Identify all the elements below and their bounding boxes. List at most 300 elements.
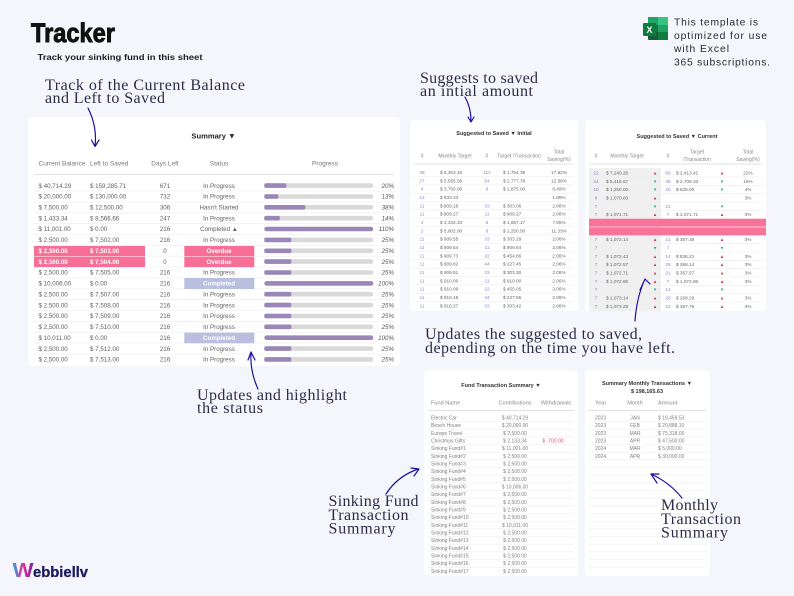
initial rows: 33 (484, 303, 490, 308)
current column headers: Target (690, 150, 705, 156)
current rows: ▼ (720, 187, 724, 192)
initial column headers: # (421, 154, 424, 160)
initial column headers (421, 150, 571, 163)
current rows: 22% (743, 170, 753, 176)
summary column headers: Current Balance (38, 160, 86, 168)
summary rows: $ 7,508.00 (90, 302, 120, 309)
fund rows: $ 2,500.00 (503, 462, 527, 468)
initial rows: $ 909.73 (440, 253, 459, 258)
summary rows: $ 7,507.00 (90, 291, 120, 298)
fund rows: Europe Travel (431, 431, 462, 437)
heading: monthly transactions (602, 381, 692, 395)
initial rows: $ 909.55 (440, 237, 459, 242)
summary rows: In Progress (203, 291, 235, 298)
current rows: ▼ (720, 204, 724, 209)
summary rows: $ 7,500.00 (38, 204, 68, 212)
initial rows: $ 909.64 (440, 245, 459, 250)
summary rows: $ 8,566.66 (90, 215, 120, 222)
current rows: ▲ (653, 296, 657, 300)
current rows: 7 (667, 246, 670, 250)
initial rows: 2.06% (552, 253, 566, 258)
annotation: suggested initial: an intial amount (420, 83, 534, 100)
initial rows: 38 (419, 170, 425, 175)
excel compatibility note: This template is (674, 18, 758, 28)
monthly rows: $ 5,000.00 (658, 446, 682, 452)
initial rows: 11 (485, 212, 490, 217)
summary rows: $ 2,500.00 (38, 313, 68, 320)
monthly column headers: Amount (658, 400, 678, 406)
fund rows: Sinking Fund#1 (431, 446, 466, 452)
initial rows: 11 (420, 278, 425, 283)
initial rows: $ 303.30 (503, 270, 522, 275)
overdue band (589, 219, 766, 235)
annotation: status (197, 387, 348, 417)
current rows: $ 7,240.26 (606, 170, 629, 176)
initial rows: 33 (484, 270, 490, 275)
monthly rows: $ 19,459.53 (658, 416, 685, 422)
current rows: ▼ (720, 287, 724, 292)
summary rows: 14% (382, 215, 394, 222)
current rows: $ 625.00 (676, 187, 695, 192)
arrow: to initial panel (465, 97, 474, 122)
summary rows: $ 1,433.34 (38, 215, 68, 222)
summary rows: 306 (160, 204, 171, 212)
current rows: $ 1,072.57 (606, 262, 629, 267)
summary column headers: Left to Saved (90, 160, 129, 168)
initial rows: 11 (420, 303, 425, 308)
initial rows: $ 454.86 (503, 253, 522, 258)
current rows: $ 1,071.71 (676, 212, 699, 217)
current column headers: Saving(%) (736, 157, 760, 163)
fund rows: Sinking Fund#5 (431, 477, 466, 483)
summary rows: 25% (381, 313, 394, 320)
annotation: updates suggested: Updates the suggested to saved, (425, 326, 642, 343)
initial rows: 11 (420, 245, 425, 250)
summary column headers: Progress (312, 160, 339, 168)
initial rows: 2.06% (552, 212, 566, 217)
current rows: 3% (745, 254, 751, 259)
monthly rows: 2023 (595, 431, 606, 437)
summary column headers (38, 160, 339, 168)
initial rows: 8 (486, 187, 489, 192)
current rows: ▲ (653, 237, 657, 242)
monthly rows: JAN (630, 416, 640, 422)
fund rows: $ 2,500.00 (503, 477, 527, 483)
annotation: sinking fund summary (328, 493, 418, 538)
summary rows: In Progress (203, 215, 235, 222)
fund rows: Sinking Fund#2 (431, 454, 466, 460)
completed highlights (184, 278, 254, 343)
initial rows: $ 909.82 (440, 262, 459, 267)
summary rows: In Progress (203, 194, 235, 201)
initial rows: 22 (484, 287, 490, 292)
monthly rows: $ 20,888.10 (658, 423, 685, 429)
current rows: ▼ (653, 287, 657, 292)
current rows: $ 1,250.00 (606, 187, 629, 192)
current rows: ▲ (720, 254, 724, 259)
annotation: updates suggested (425, 326, 675, 357)
initial rows: 114 (483, 170, 491, 175)
summary rows: 216 (160, 281, 171, 288)
summary rows: 38% (382, 204, 394, 212)
summary rows: $ 7,509.00 (90, 313, 120, 320)
current rows: ▼ (720, 246, 724, 250)
monthly rows: 2023 (595, 438, 606, 444)
summary rows: $ 2,500.00 (38, 248, 68, 255)
summary rows: $ 2,500.00 (38, 237, 68, 244)
current rows: $ 1,073.29 (606, 304, 629, 309)
initial column headers: Monthly Target (438, 154, 472, 160)
annotation: status: the status (197, 400, 263, 417)
current rows: 66 (665, 170, 671, 176)
annotation: monthly summary (661, 497, 741, 542)
current rows: 7 (595, 296, 598, 300)
fund rows: $ 20,000.00 (502, 423, 528, 429)
fund rows: $ 10,011.00 (502, 523, 528, 529)
annotation: monthly summary: Transaction (661, 511, 741, 528)
annotation: sinking fund summary: Sinking Fund (328, 493, 418, 510)
summary rows: 216 (160, 226, 171, 233)
fund rows: $ 11,001.00 (502, 446, 528, 452)
current rows: 3% (745, 237, 751, 242)
current rows: 3% (745, 212, 751, 217)
current rows: 28 (665, 262, 671, 267)
current column headers: /Transaction (683, 157, 711, 163)
summary rows: $ 7,512.00 (90, 346, 120, 353)
annotation: monthly summary: Monthly (661, 497, 718, 514)
initial rows: $ 909.64 (503, 245, 522, 250)
monthly column headers: Month (627, 400, 643, 406)
monthly rows: $ 75,318.00 (658, 431, 685, 437)
fund rows: $ 2,500.00 (503, 546, 527, 552)
heading: summary: Summary ▼ (191, 132, 236, 140)
summary rows: 216 (160, 346, 171, 353)
current rows: ▼ (653, 246, 657, 250)
monthly column headers (595, 400, 678, 406)
heading: monthly transactions: $ 198,165.63 (631, 389, 663, 395)
annotation: monthly summary: Summary (661, 524, 728, 542)
initial rows: $ 909.27 (503, 212, 522, 217)
initial rows: $ 303.18 (503, 237, 522, 242)
fund rows: $ 2,500.00 (503, 569, 527, 575)
summary rows: Overdue (206, 248, 232, 255)
current rows: $ 268.29 (676, 296, 695, 300)
heading: monthly transactions: Summary Monthly Transactions ▼ (602, 381, 692, 387)
monthly rows: MAR (629, 446, 641, 452)
summary rows: $ 12,500.00 (90, 204, 123, 212)
current rows: 21 (665, 237, 671, 242)
summary rows (38, 183, 394, 364)
current rows: 10 (593, 187, 599, 192)
current rows: 3% (745, 270, 751, 276)
summary rows: 25% (381, 324, 394, 331)
summary rows: 100% (378, 281, 394, 288)
subtitle: Track your sinking fund in this sheet (38, 52, 203, 62)
current rows: 22 (593, 170, 599, 176)
summary rows: In Progress (203, 237, 235, 244)
summary rows: $ 2,500.00 (38, 259, 68, 266)
summary rows: 25% (381, 291, 394, 298)
initial rows: 2.06% (552, 303, 566, 308)
fund column headers (431, 400, 571, 406)
initial rows: $ 909.27 (440, 212, 459, 217)
summary rows: $ 0.00 (90, 226, 108, 233)
initial rows: 2.06% (552, 270, 566, 275)
initial rows: $ 833.33 (440, 195, 459, 200)
initial rows: 11 (485, 245, 490, 250)
arrow: to status (248, 352, 258, 389)
current column headers: # (595, 154, 598, 160)
monthly rows (595, 416, 685, 460)
current rows: $ 2,708.33 (676, 179, 699, 184)
summary rows: 247 (160, 215, 171, 222)
fund rows: $ 2,500.00 (503, 500, 527, 506)
summary rows: $ 2,500.00 (38, 346, 68, 353)
current rows: 7 (595, 212, 598, 217)
current rows: 7 (595, 279, 598, 284)
current rows: 3% (745, 279, 751, 284)
current rows: ▲ (720, 270, 724, 276)
fund rows: $ 2,500.00 (503, 561, 527, 567)
current rows: 7 (595, 237, 598, 242)
initial rows: 2.06% (552, 295, 566, 300)
current rows: $ 268.14 (676, 262, 695, 267)
initial rows: $ 910.00 (440, 278, 459, 283)
summary rows: $ 2,500.00 (38, 291, 68, 298)
annotation: current balance (45, 77, 245, 107)
summary rows: 216 (160, 324, 171, 331)
annotation: sinking fund summary: Summary (328, 520, 396, 538)
initial rows: 11 (420, 203, 425, 208)
current rows: $ 1,073.14 (606, 296, 629, 300)
fund column headers: Withdrawals (541, 400, 571, 406)
fund rows: Sinking Fund#3 (431, 462, 466, 468)
current rows: ▼ (653, 179, 657, 184)
annotation: current balance: Track of the Current Balance (45, 77, 245, 94)
annotation: current balance: and Left to Saved (45, 90, 165, 107)
summary rows: $ 7,504.00 (90, 259, 120, 266)
current rows: ▲ (720, 237, 724, 242)
monthly rows: APR (630, 454, 641, 460)
fund rows: Sinking Fund#14 (431, 546, 469, 552)
current rows: 3% (745, 196, 751, 200)
current column headers: Total (743, 150, 753, 156)
initial rows: 33 (484, 203, 490, 208)
initial rows: $ 909.91 (440, 270, 459, 275)
fund rows: $ 2,500.00 (503, 431, 527, 437)
summary rows: 0 (163, 259, 167, 266)
summary rows: 25% (381, 346, 394, 353)
summary rows: 216 (160, 357, 171, 364)
summary rows: $ 2,500.00 (38, 357, 68, 364)
fund rows: $ 2,500.00 (503, 454, 527, 460)
summary rows: 25% (381, 248, 394, 255)
summary rows: 216 (160, 302, 171, 309)
shaded monthly column (589, 168, 661, 311)
current rows: 48 (665, 179, 671, 184)
summary rows: Overdue (206, 259, 232, 266)
annotation: updates suggested: depending on the time you have left. (425, 340, 675, 357)
current rows: ▼ (653, 204, 657, 209)
initial rows: 11.33% (551, 228, 567, 233)
current rows: ▲ (653, 170, 657, 176)
initial rows: 1.89% (552, 195, 566, 200)
current column headers: Monthly Target (610, 154, 644, 160)
summary rows: 110% (379, 226, 394, 233)
current rows: 21 (665, 204, 671, 209)
current rows: ▲ (720, 296, 724, 300)
panel: monthly transactions (585, 370, 710, 576)
current rows: 7 (595, 204, 598, 209)
monthly rows: 2023 (595, 416, 606, 422)
current rows: $ 1,072.71 (606, 270, 629, 276)
initial rows: $ 1,250.50 (503, 228, 526, 233)
fund rows: Sinking Fund#9 (431, 508, 466, 514)
current rows: 24 (593, 179, 599, 184)
logo: Webbiellv (12, 560, 88, 582)
initial rows: 8 (486, 228, 489, 233)
fund rows: Sinking Fund#10 (431, 515, 469, 521)
summary rows: $ 2,500.00 (38, 302, 68, 309)
monthly rows: $ 30,000.00 (658, 454, 685, 460)
current rows: ▲ (653, 262, 657, 267)
current rows: 20 (665, 187, 671, 192)
current rows: 16% (743, 179, 753, 184)
initial rows: 17.82% (551, 170, 567, 175)
initial rows: 11 (420, 287, 425, 292)
summary rows: 25% (381, 259, 394, 266)
initial rows: 44 (484, 295, 490, 300)
current rows: ▲ (653, 212, 657, 217)
summary rows: In Progress (203, 270, 235, 277)
initial rows: $ 2,777.78 (503, 178, 526, 183)
initial rows: 2.06% (552, 203, 566, 208)
initial rows: 6 (486, 220, 489, 225)
current rows: 7 (595, 262, 598, 267)
summary column headers: Days Left (151, 160, 179, 168)
summary rows: 20% (381, 183, 394, 190)
initial rows: 11 (420, 270, 425, 275)
initial rows: $ 910.09 (440, 287, 459, 292)
current rows: 3% (745, 296, 751, 300)
current rows: 3% (745, 304, 751, 309)
current rows: ▲ (720, 279, 724, 284)
summary rows: $ 20,000.00 (38, 194, 72, 201)
fund rows: $ 10,006.00 (502, 484, 528, 490)
summary rows: $ 7,510.00 (90, 324, 120, 331)
fund rows: $ -700.00 (542, 438, 564, 444)
summary rows: $ 7,502.00 (90, 237, 120, 244)
fund rows: $ 2,500.00 (503, 515, 527, 521)
initial rows: $ 227.45 (503, 262, 522, 267)
initial rows: 11 (420, 212, 425, 217)
initial column headers: Total (554, 150, 564, 156)
summary rows: $ 10,011.00 (38, 335, 71, 342)
summary rows: In Progress (203, 357, 235, 364)
summary rows: In Progress (203, 302, 235, 309)
summary rows: $ 2,500.00 (38, 324, 68, 331)
current rows: $ 2,413.42 (676, 170, 699, 176)
current rows: 7 (595, 270, 598, 276)
fund rows: $ 2,500.00 (503, 508, 527, 514)
monthly rows: 2024 (595, 446, 606, 452)
summary rows: 13% (382, 194, 394, 201)
arrow: to fund summary (386, 468, 419, 494)
initial column headers: Target /Transaction (497, 154, 541, 160)
fund column headers: Contributions (499, 400, 532, 406)
current rows: $ 1,071.71 (606, 212, 629, 217)
initial column headers: # (486, 154, 489, 160)
current rows: 14 (665, 254, 671, 259)
fund rows: Sinking Fund#7 (431, 492, 466, 498)
initial rows: $ 303.06 (503, 203, 522, 208)
summary rows: 216 (160, 313, 171, 320)
current rows: 7 (667, 279, 670, 284)
summary rows: In Progress (203, 313, 235, 320)
summary rows: 216 (160, 335, 171, 342)
summary rows: $ 7,513.00 (90, 357, 120, 364)
current column headers (595, 150, 760, 163)
fund rows: $ 2,500.00 (503, 492, 527, 498)
initial rows: $ 1,875.00 (503, 187, 526, 192)
summary rows: 216 (160, 237, 171, 244)
summary rows: Completed ▲ (200, 226, 238, 233)
fund rows: Sinking Fund#15 (431, 554, 469, 560)
fund rows: Sinking Fund#11 (431, 523, 468, 529)
fund rows: $ 2,500.00 (503, 538, 527, 544)
summary rows: Hasn't Started (199, 204, 239, 212)
current rows: ▼ (720, 179, 724, 184)
initial rows: $ 910.27 (440, 303, 459, 308)
summary rows: $ 0.00 (90, 335, 108, 342)
initial rows: 11 (420, 253, 425, 258)
progress bars (264, 183, 373, 362)
summary rows: $ 0.00 (90, 281, 108, 288)
fund rows: Beach House (431, 423, 461, 429)
current rows: ▲ (720, 212, 724, 217)
initial rows: 8.49% (552, 187, 566, 192)
current rows: ▲ (720, 262, 724, 267)
current rows: 7 (595, 304, 598, 309)
initial rows: 12 (419, 195, 425, 200)
summary rows: 25% (381, 237, 394, 244)
monthly rows: FEB (630, 423, 641, 429)
current rows (593, 170, 753, 309)
fund rows: Sinking Fund#8 (431, 500, 466, 506)
monthly rows: 2023 (595, 423, 606, 429)
excel compatibility note: 365 subscriptions. (674, 58, 770, 68)
fund rows: Sinking Fund#16 (431, 561, 469, 567)
initial rows: 22 (484, 253, 490, 258)
initial rows: 2.06% (552, 245, 566, 250)
excel compatibility note: with Excel (673, 44, 729, 55)
initial rows: $ 3,750.00 (440, 187, 463, 192)
current rows: 28 (665, 296, 671, 300)
current rows: 21 (665, 304, 671, 309)
icon: excel logo (643, 17, 668, 40)
initial rows: $ 455.05 (503, 287, 522, 292)
summary rows: In Progress (203, 346, 235, 353)
current rows: $ 357.38 (676, 237, 695, 242)
initial rows: 4 (421, 187, 424, 192)
excel compatibility note: optimized for use (674, 31, 767, 42)
monthly rows: APR (630, 438, 641, 444)
current rows: 7 (667, 212, 670, 217)
summary rows: 732 (160, 194, 171, 201)
monthly rows: $ 47,500.00 (658, 438, 685, 444)
arrow: to current panel (635, 279, 650, 321)
initial rows: 11 (420, 237, 425, 242)
